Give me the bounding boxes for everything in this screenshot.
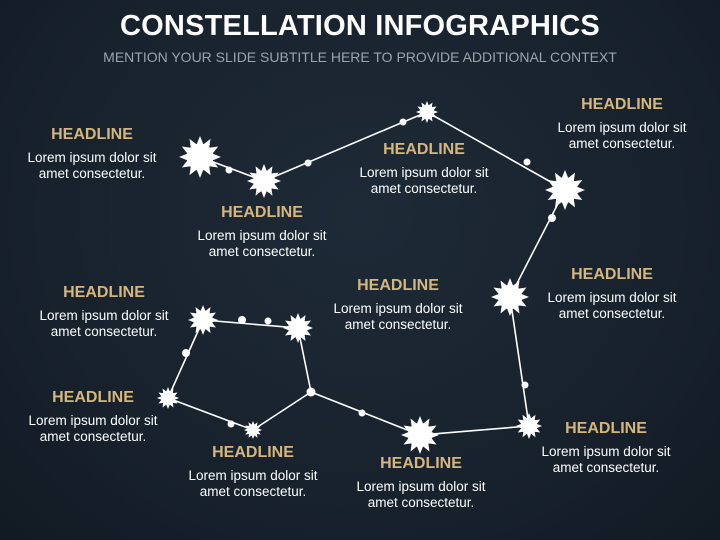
text block 5: HEADLINE — [571, 266, 653, 283]
text block 3: Lorem ipsum dolor sit — [359, 165, 489, 180]
text block 5: amet consectetur. — [559, 306, 665, 321]
text block 3: amet consectetur. — [371, 181, 477, 196]
text block 1: Lorem ipsum dolor sit — [27, 150, 157, 165]
text block 11: HEADLINE — [565, 420, 647, 437]
text block 2: HEADLINE — [221, 204, 303, 221]
text block 4: Lorem ipsum dolor sit — [557, 120, 687, 135]
text block 10 — [356, 455, 486, 510]
text block 9: Lorem ipsum dolor sit — [188, 468, 318, 483]
text block 11 — [541, 420, 671, 475]
text block 11: Lorem ipsum dolor sit — [541, 444, 671, 459]
text block 6: amet consectetur. — [345, 317, 451, 332]
text block 5 — [547, 266, 677, 321]
text block 9 — [188, 444, 318, 499]
text block 10: HEADLINE — [380, 455, 462, 472]
text block 6: Lorem ipsum dolor sit — [333, 301, 463, 316]
text block 10: amet consectetur. — [368, 495, 474, 510]
text block 8: Lorem ipsum dolor sit — [28, 413, 158, 428]
text block 8: amet consectetur. — [40, 429, 146, 444]
text block 2 — [197, 204, 327, 259]
text block 7 — [39, 284, 169, 339]
text block 4: HEADLINE — [581, 96, 663, 113]
text block 7: HEADLINE — [63, 284, 145, 301]
text block 11: amet consectetur. — [553, 460, 659, 475]
text block 4: amet consectetur. — [569, 136, 675, 151]
text block 8: HEADLINE — [52, 389, 134, 406]
text block 4 — [557, 96, 687, 151]
text block 2: amet consectetur. — [209, 244, 315, 259]
text block 3 — [359, 141, 489, 196]
text block 3: HEADLINE — [383, 141, 465, 158]
text block 1: amet consectetur. — [39, 166, 145, 181]
text block 10: Lorem ipsum dolor sit — [356, 479, 486, 494]
text block 2: Lorem ipsum dolor sit — [197, 228, 327, 243]
subtitle: MENTION YOUR SLIDE SUBTITLE HERE TO PROVIDE ADDITIONAL CONTEXT — [103, 49, 617, 65]
text block 9: amet consectetur. — [200, 484, 306, 499]
text block 7: amet consectetur. — [51, 324, 157, 339]
text block 6 — [333, 277, 463, 332]
text block 5: Lorem ipsum dolor sit — [547, 290, 677, 305]
text block 1 — [27, 126, 157, 181]
stars — [157, 101, 585, 454]
text block 7: Lorem ipsum dolor sit — [39, 308, 169, 323]
title: CONSTELLATION INFOGRAPHICS — [120, 10, 600, 42]
text block 6: HEADLINE — [357, 277, 439, 294]
text block 9: HEADLINE — [212, 444, 294, 461]
text block 8 — [28, 389, 158, 444]
text block 1: HEADLINE — [51, 126, 133, 143]
